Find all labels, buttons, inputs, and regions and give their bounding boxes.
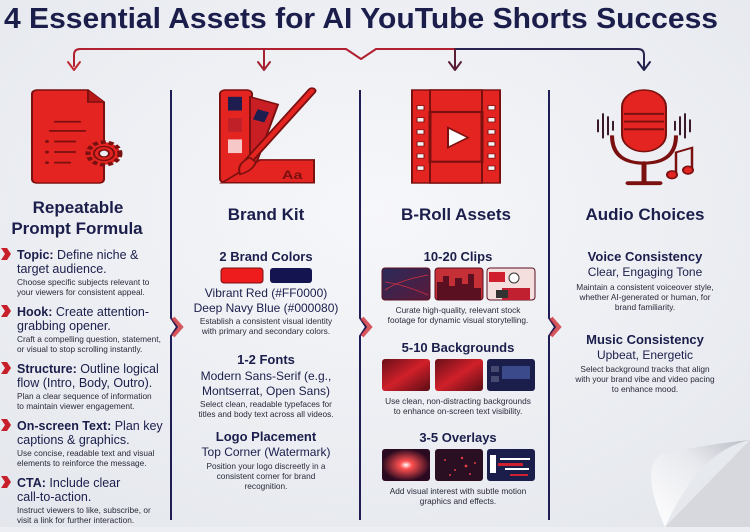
panel: b-roll details: to enhance on-screen text visibility. bbox=[394, 406, 522, 416]
panel: b-roll details: graphics and effects. bbox=[420, 496, 496, 506]
panel: prompt formula bullets: Instruct viewers to like, subscribe, or bbox=[17, 505, 151, 515]
panel: brand kit details bbox=[194, 249, 338, 491]
panel: prompt formula bullets: call-to-action. bbox=[17, 490, 91, 504]
panel: b-roll details: 3-5 Overlays bbox=[419, 430, 497, 445]
panel: prompt formula bullets: grabbing opener. bbox=[17, 319, 111, 333]
icon: film strip with play bbox=[412, 90, 500, 183]
panel: brand kit details: Top Corner (Watermark) bbox=[202, 445, 330, 459]
panel: b-roll details: Use clean, non-distracting backgrounds bbox=[385, 396, 531, 406]
panel: prompt formula bullets: On-screen Text: Plan key bbox=[17, 419, 163, 433]
panel: audio details: Clear, Engaging Tone bbox=[588, 265, 703, 279]
heading: Repeatable Prompt Formula: Repeatable bbox=[33, 198, 123, 217]
panel: brand kit details: Logo Placement bbox=[216, 429, 317, 444]
panel: prompt formula bullets: captions & graphics. bbox=[17, 433, 130, 447]
heading: Repeatable Prompt Formula bbox=[11, 198, 143, 238]
panel: prompt formula bullets bbox=[1, 248, 163, 525]
panel: prompt formula bullets: Hook: Create attention- bbox=[17, 305, 149, 319]
panel: audio details: brand familiarity. bbox=[615, 302, 675, 312]
panel: brand kit details: Vibrant Red (#FF0000) bbox=[205, 286, 327, 300]
connector arrows bbox=[68, 49, 650, 70]
panel: audio details: Select background tracks that align bbox=[580, 364, 710, 374]
panel: b-roll details bbox=[382, 249, 535, 506]
panel: audio details: with your brand vibe and video pacing bbox=[574, 374, 715, 384]
panel: brand kit details: 1-2 Fonts bbox=[237, 352, 295, 367]
panel: brand kit details: Position your logo discreetly in a bbox=[207, 461, 326, 471]
panel: prompt formula bullets: Structure: Outline logical bbox=[17, 362, 159, 376]
panel: prompt formula bullets: your viewers for consistent appeal. bbox=[17, 287, 145, 297]
panel: prompt formula bullets: elements to reinforce the message. bbox=[17, 458, 147, 468]
panel: audio details: Music Consistency bbox=[586, 332, 705, 347]
panel: audio details: whether AI-generated or human, for bbox=[579, 292, 711, 302]
panel: brand kit details: recognition. bbox=[245, 481, 287, 491]
panel: brand kit details: Modern Sans-Serif (e.g., bbox=[201, 369, 331, 383]
title: 4 Essential Assets for AI YouTube Shorts Success bbox=[4, 3, 718, 35]
panel: audio details: Maintain a consistent voiceover style, bbox=[576, 282, 714, 292]
panel: prompt formula bullets: Topic: Define niche & bbox=[17, 248, 139, 262]
panel: brand kit details: Select clean, readable typefaces for bbox=[200, 399, 332, 409]
panel: b-roll details: 10-20 Clips bbox=[424, 249, 492, 264]
panel: prompt formula bullets: or visual to stop scrolling instantly. bbox=[17, 344, 142, 354]
panel: audio details bbox=[574, 249, 715, 394]
icon: brand kit palette: Aa bbox=[282, 169, 303, 182]
panel: b-roll details: 5-10 Backgrounds bbox=[402, 340, 514, 355]
dividers bbox=[171, 90, 559, 520]
panel: audio details: Upbeat, Energetic bbox=[597, 348, 693, 362]
panel: brand kit details: Establish a consistent visual identity bbox=[200, 316, 333, 326]
page curl bbox=[651, 440, 750, 527]
panel: brand kit details: with primary and secondary colors. bbox=[201, 326, 330, 336]
panel: prompt formula bullets: Craft a compelling question, statement, bbox=[17, 334, 161, 344]
panel: prompt formula bullets: visit a link for further interaction. bbox=[17, 515, 134, 525]
panel: b-roll details: Add visual interest with subtle motion bbox=[390, 486, 527, 496]
panel: prompt formula bullets: flow (Intro, Body, Outro). bbox=[17, 376, 152, 390]
panel: b-roll details: footage for dynamic visual storytelling. bbox=[388, 315, 528, 325]
heading: Repeatable Prompt Formula: Prompt Formula bbox=[11, 219, 143, 238]
panel: brand kit details: titles and body text across all videos. bbox=[198, 409, 334, 419]
panel: audio details: to enhance mood. bbox=[612, 384, 678, 394]
panel: prompt formula bullets: Use concise, readable text and visual bbox=[17, 448, 155, 458]
panel: brand kit details: consistent corner for brand bbox=[217, 471, 316, 481]
panel: prompt formula bullets: target audience. bbox=[17, 262, 107, 276]
panel: brand kit details: Deep Navy Blue (#000080) bbox=[194, 301, 338, 315]
panel: brand kit details: Montserrat, Open Sans) bbox=[202, 384, 330, 398]
panel: b-roll details: Curate high-quality, relevant stock bbox=[396, 305, 521, 315]
panel: prompt formula bullets: to maintain viewer engagement. bbox=[17, 401, 135, 411]
icon: microphone with music note bbox=[598, 90, 693, 183]
panel: audio details: Voice Consistency bbox=[588, 249, 703, 264]
icon: brand kit palette bbox=[220, 90, 314, 183]
heading: Brand Kit: Brand Kit bbox=[228, 205, 305, 224]
icon: document with gear bbox=[32, 90, 120, 183]
heading: Audio Choices: Audio Choices bbox=[585, 205, 705, 224]
panel: prompt formula bullets: Plan a clear sequence of information bbox=[17, 391, 152, 401]
panel: brand kit details: 2 Brand Colors bbox=[219, 249, 313, 264]
heading: B-Roll Assets: B-Roll Assets bbox=[401, 205, 511, 224]
panel: prompt formula bullets: CTA: Include clear bbox=[17, 476, 120, 490]
panel: prompt formula bullets: Choose specific subjects relevant to bbox=[17, 277, 150, 287]
